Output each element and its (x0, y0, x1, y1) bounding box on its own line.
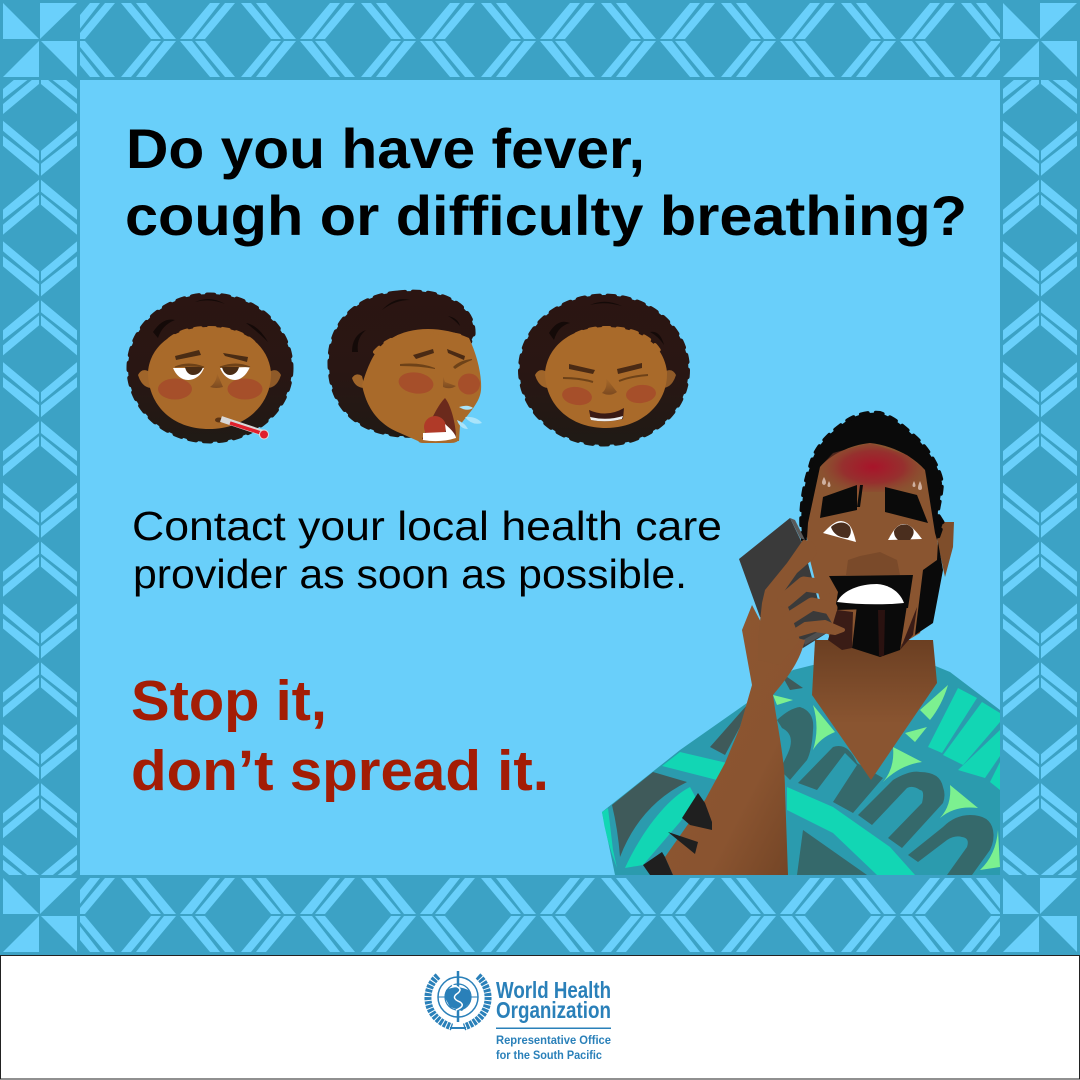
face (807, 435, 943, 657)
neck (812, 640, 937, 780)
title: cough or difficulty breathing? (125, 184, 967, 247)
WHO emblem (428, 971, 488, 1028)
WHO wordmark (496, 977, 611, 1062)
right ear (937, 522, 954, 577)
beard (828, 542, 943, 657)
face: breathing difficulty (520, 295, 688, 445)
WHO wordmark: for the South Pacific (496, 1048, 602, 1062)
phone (739, 518, 835, 648)
slogan: don’t spread it. (131, 739, 549, 803)
face: coughing (329, 291, 482, 443)
shirt (602, 665, 1000, 875)
title: Do you have fever, (126, 117, 645, 180)
face: fever with thermometer (128, 294, 292, 442)
WHO wordmark: World Health (496, 977, 611, 1003)
eyes (823, 521, 922, 542)
WHO logo (428, 971, 611, 1062)
slogan (131, 669, 549, 803)
central light blue panel (80, 80, 1000, 875)
body text (132, 503, 722, 597)
WHO wordmark: Representative Office (496, 1033, 611, 1047)
man on the phone (602, 413, 1000, 875)
footer white panel (0, 956, 1080, 1079)
arm and hand (643, 540, 843, 875)
slogan: Stop it, (131, 669, 327, 733)
title (125, 117, 967, 247)
sweat drops (822, 477, 922, 490)
hair (801, 413, 943, 540)
body text: Contact your local health care (132, 503, 722, 549)
eyebrows (820, 485, 928, 523)
WHO wordmark: Organization (496, 997, 611, 1023)
body text: provider as soon as possible. (133, 551, 687, 597)
